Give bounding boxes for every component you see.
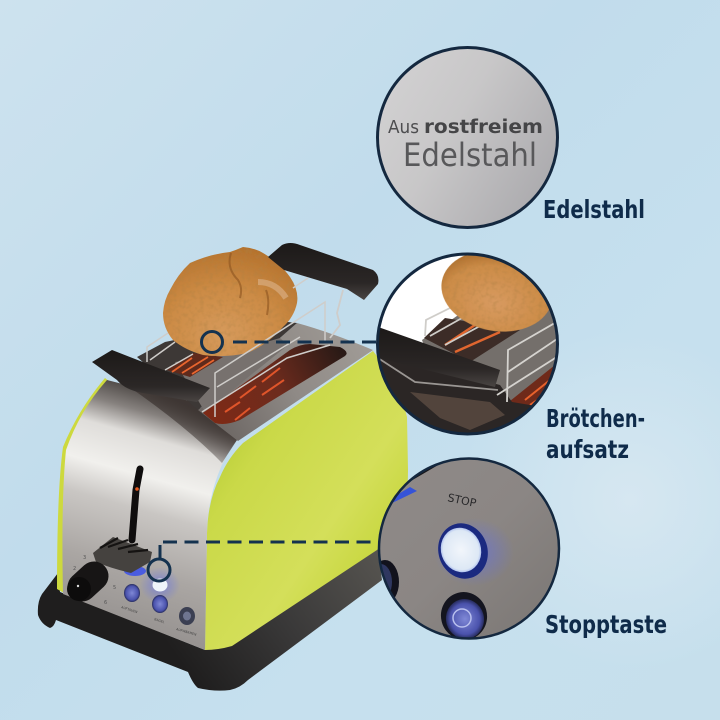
text: Aus: Aus	[388, 118, 419, 138]
toaster base	[38, 546, 382, 691]
button: defrost	[121, 584, 140, 614]
right wire rack	[202, 278, 343, 417]
label: Brötchenaufsatz: aufsatz	[546, 435, 629, 464]
green left sliver	[57, 378, 110, 593]
toaster top plate	[198, 323, 373, 441]
left handle	[92, 350, 210, 402]
toaster	[38, 243, 408, 691]
lever indicator light	[135, 487, 139, 491]
button: bagel	[152, 595, 168, 624]
label: Edelstahl: Edelstahl	[543, 195, 645, 224]
text: rostfreiem: rostfreiem	[424, 117, 543, 138]
roll	[441, 256, 549, 332]
detail circle: stop button	[378, 457, 560, 640]
dark corner	[412, 466, 437, 480]
dial scale numbers: 6	[104, 600, 107, 606]
button: stop LED	[140, 567, 180, 603]
detail circle: stainless steel	[378, 48, 558, 228]
green side panel	[205, 351, 408, 650]
button: reheat: AUFWÄRMEN	[176, 626, 198, 637]
dial scale numbers	[73, 555, 116, 606]
bread roll	[163, 247, 297, 356]
label: Brötchenaufsatz: Brötchen-	[546, 404, 645, 433]
browning lever slot	[132, 469, 140, 540]
left wire rack	[147, 333, 193, 370]
lower body	[380, 358, 532, 432]
slot interior	[511, 366, 553, 405]
left neighbour button	[381, 560, 399, 598]
callout marker: stop button	[148, 542, 378, 581]
steel plate backdrop	[422, 310, 556, 400]
right toast slot	[203, 344, 347, 424]
dial scale numbers: 5	[113, 585, 116, 591]
button: defrost: AUFTAUEN	[121, 605, 139, 614]
button: bagel: BAGEL	[154, 617, 165, 624]
text: STOP: STOP	[446, 491, 478, 510]
glow	[450, 522, 509, 582]
text: Edelstahl in circle: Edelstahl	[403, 136, 537, 174]
right handle	[268, 243, 378, 300]
label: Stopptaste: Stopptaste	[545, 610, 667, 639]
detail circle: bread attachment	[376, 252, 559, 436]
browning dial	[67, 576, 94, 601]
lever grip	[93, 537, 152, 576]
stop LED	[438, 523, 488, 579]
handle	[378, 327, 500, 387]
lower button	[440, 592, 488, 638]
callout marker: bread attachment	[202, 332, 378, 352]
wire frame	[497, 320, 560, 402]
button: reheat	[176, 607, 198, 637]
dial scale numbers: 2	[73, 566, 76, 572]
left toast slot	[167, 353, 223, 377]
steel front panel	[62, 380, 237, 650]
dial scale numbers: 3	[83, 555, 86, 561]
